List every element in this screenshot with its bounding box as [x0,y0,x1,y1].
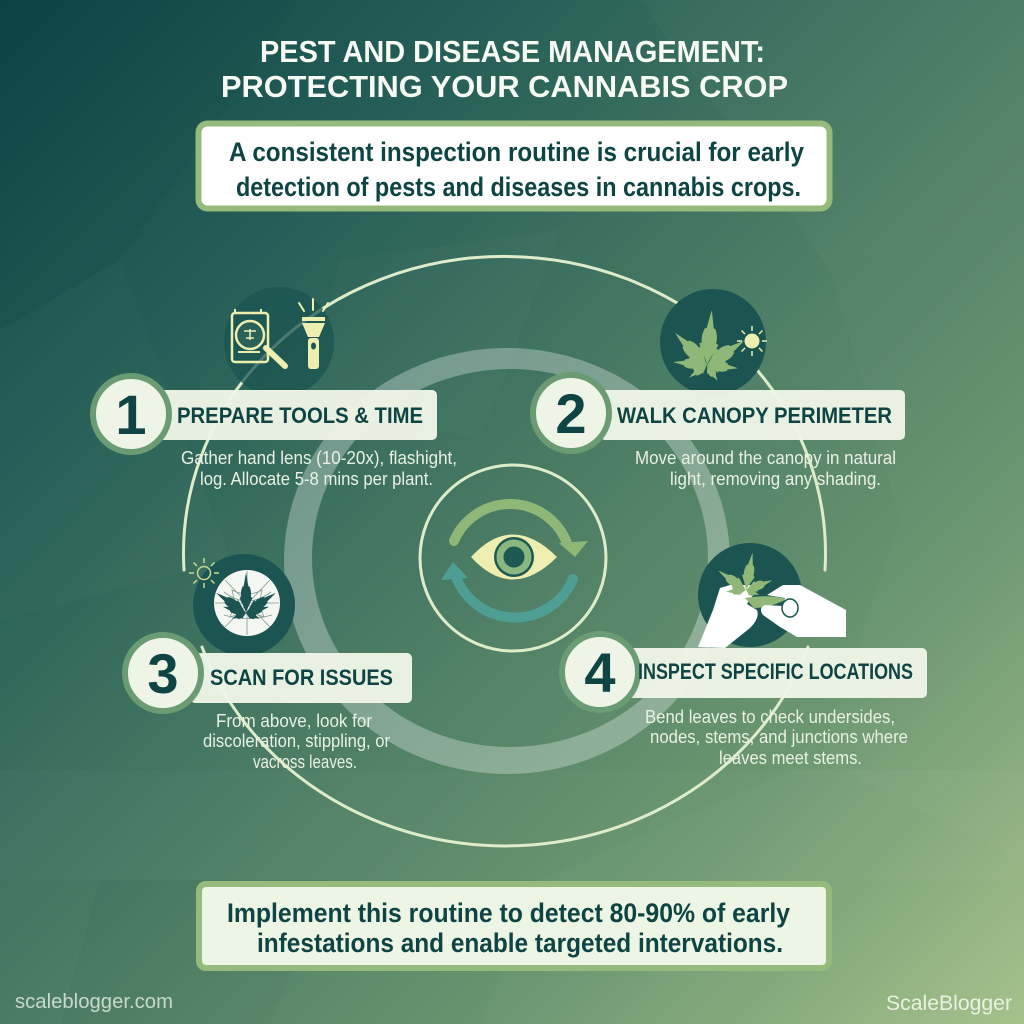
text: step 2 description [635,448,896,489]
number badge: step 3 [125,635,201,711]
title [221,34,788,104]
panel: step 1 [93,287,457,489]
text: step 4 description: leaves meet stems. [719,748,862,768]
number badge: step 3: 3 [147,642,179,705]
number badge: step 4: 4 [584,641,616,704]
heading: step 1: PREPARE TOOLS & TIME [177,403,423,428]
title bar: step 1 [130,390,437,440]
panel: step 2 [533,289,905,489]
text: step 4 description: nodes, stems, and junctions where [650,727,908,747]
text: step 2 description: Move around the canopy in natural [635,448,896,468]
heading: step 4: INSPECT SPECIFIC LOCATIONS [638,659,913,684]
teal cycle arrow [441,562,573,618]
title: PROTECTING YOUR CANNABIS CROP [221,69,788,104]
icon: cannabis leaf and sun [660,289,767,395]
panel: step 3 [125,554,412,772]
title bar: step 3 [190,653,412,703]
callout: closing statement [199,884,829,968]
number badge: step 1 [93,376,169,452]
callout: intro statement: detection of pests and diseases in cannabis crops. [236,172,801,202]
middle translucent ring [284,348,730,774]
center circle with eye and cycle arrows [420,465,606,651]
callout: intro statement [198,124,830,208]
text: step 1 description: Gather hand lens (10-20x), flashight, [181,448,457,468]
text: step 4 description [645,707,908,768]
text: step 1 description [181,448,457,489]
icon: hands bending a leaf [698,543,846,648]
icon: leaf in spider web with sun [189,554,295,656]
callout: closing statement: infestations and enable targeted intervations. [257,928,783,958]
text: step 3 description: From above, look for [216,711,372,731]
title: PEST AND DISEASE MANAGEMENT: [260,34,765,69]
green cycle arrow [454,504,588,557]
callout: closing statement: Implement this routine to detect 80-90% of early [227,898,790,928]
number badge: step 2: 2 [555,382,587,445]
text: step 3 description [203,711,390,772]
watermark: website: scaleblogger.com [15,991,173,1013]
outer cycle ring [183,256,825,846]
number badge: step 4 [562,634,638,710]
text: step 3 description: discoleration, stippling, or [203,731,390,751]
callout: intro statement: A consistent inspection routine is crucial for early [229,137,804,167]
number badge: step 2 [533,375,609,451]
text: step 3 description: vacross leaves. [253,752,357,772]
panel: step 4 [562,543,927,768]
text: step 2 description: light, removing any shading. [670,469,881,489]
heading: step 3: SCAN FOR ISSUES [210,665,393,690]
title bar: step 4 [625,648,927,698]
heading: step 2: WALK CANOPY PERIMETER [617,403,892,428]
watermark: brand: ScaleBlogger [886,992,1012,1015]
icon: clipboard, magnifier and flashlight [224,287,334,397]
title bar: step 2 [600,390,905,440]
icon: eye [471,534,557,580]
number badge: step 1: 1 [115,383,147,446]
text: step 4 description: Bend leaves to check undersides, [645,707,895,727]
text: step 1 description: log. Allocate 5-8 mins per plant. [200,469,433,489]
